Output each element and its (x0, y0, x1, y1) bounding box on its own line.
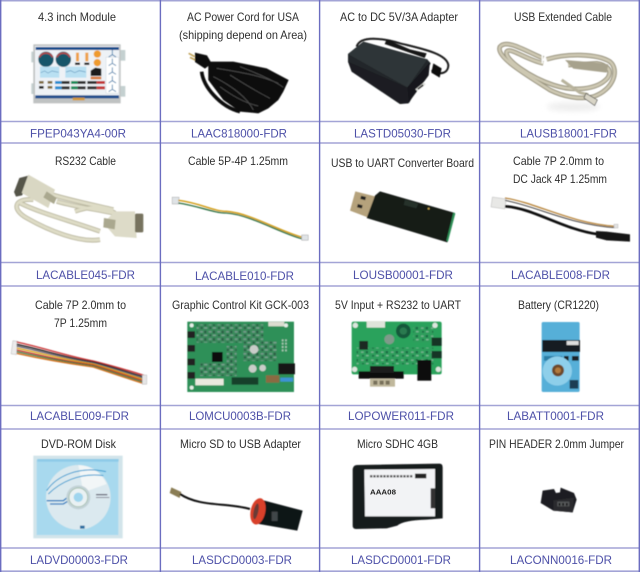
image: micro SD card: AAA08 (370, 487, 397, 496)
image: multi colour cable (11, 341, 147, 384)
heading: Micro SD to USB Adapter (180, 437, 301, 451)
heading: AC Power Cord for USA (187, 10, 299, 24)
heading (35, 298, 126, 330)
panel: Pin Header Jumper (489, 437, 624, 567)
heading: Cable 7P 2.0mm to (513, 154, 604, 168)
image: RS232 cable (14, 175, 143, 240)
panel: Cable 7P to DC Jack (491, 154, 630, 282)
image: USB dongle (350, 191, 455, 242)
image: coin battery pack (542, 322, 580, 392)
heading: Micro SDHC 4GB (357, 437, 438, 451)
image: LCD module (31, 44, 125, 103)
image: thin wire cable (172, 197, 308, 240)
part number: LOPOWER011-FDR (348, 409, 454, 423)
panel: RS232 Cable (14, 154, 143, 282)
part number: LOUSB00001-FDR (353, 268, 453, 282)
heading: Graphic Control Kit GCK-003 (172, 298, 309, 312)
panel: Micro SDHC (351, 437, 451, 567)
image: power adapter (348, 39, 448, 104)
panel: USB Extended Cable (499, 10, 617, 140)
part number: LACABLE045-FDR (36, 268, 135, 282)
heading: DC Jack 4P 1.25mm (513, 172, 607, 186)
image: DVD in sleeve (33, 456, 123, 538)
heading: 7P 1.25mm (54, 316, 107, 330)
part number: LASTD05030-FDR (354, 126, 451, 140)
part number: LACABLE008-FDR (511, 268, 610, 282)
part number: LOMCU0003B-FDR (189, 409, 291, 423)
panel: DVD-ROM Disk (30, 437, 128, 567)
part number: LACABLE010-FDR (195, 269, 294, 283)
part number: LAAC818000-FDR (191, 126, 287, 140)
heading: AC to DC 5V/3A Adapter (340, 10, 458, 24)
image: jumper (541, 488, 577, 512)
heading: Cable 7P 2.0mm to (35, 298, 126, 312)
part number: LASDCD0001-FDR (351, 553, 451, 567)
part number: LASDCD0003-FDR (192, 553, 292, 567)
heading: (shipping depend on Area) (179, 28, 307, 42)
image: coiled power cord (189, 53, 289, 113)
panel: 5V Input RS232 to UART (335, 298, 462, 423)
heading: USB to UART Converter Board (331, 156, 474, 170)
heading: Battery (CR1220) (518, 298, 599, 312)
heading: 4.3 inch Module (38, 10, 116, 24)
panel: AC to DC Adapter (340, 10, 458, 140)
panel: AC Power Cord (179, 10, 307, 140)
part number: LABATT0001-FDR (507, 409, 604, 423)
heading (179, 10, 307, 42)
panel: Cable 5P-4P (172, 154, 308, 283)
panel: USB to UART Converter (331, 156, 474, 282)
part number: LACONN0016-FDR (510, 553, 612, 567)
image: USB cable (499, 44, 615, 111)
panel: Micro SD to USB Adapter (170, 437, 303, 567)
part number: LAUSB18001-FDR (520, 126, 617, 140)
heading: RS232 Cable (55, 154, 116, 168)
heading: 5V Input + RS232 to UART (335, 298, 462, 312)
panel: Cable 7P to 7P (11, 298, 147, 423)
image: card reader (170, 487, 303, 531)
heading: USB Extended Cable (514, 10, 612, 24)
panel: Graphic Control Kit (172, 298, 309, 423)
part number: FPEP043YA4-00R (30, 126, 126, 140)
part number: LACABLE009-FDR (30, 409, 129, 423)
panel: Battery (507, 298, 604, 423)
image: control board (187, 322, 295, 392)
image: power board (352, 321, 442, 387)
panel: 4.3 inch Module (30, 10, 126, 140)
part number: LADVD00003-FDR (30, 553, 128, 567)
heading: DVD-ROM Disk (41, 437, 117, 451)
heading: Cable 5P-4P 1.25mm (188, 154, 288, 168)
heading (513, 154, 607, 186)
image: DC jack cable (491, 197, 630, 242)
